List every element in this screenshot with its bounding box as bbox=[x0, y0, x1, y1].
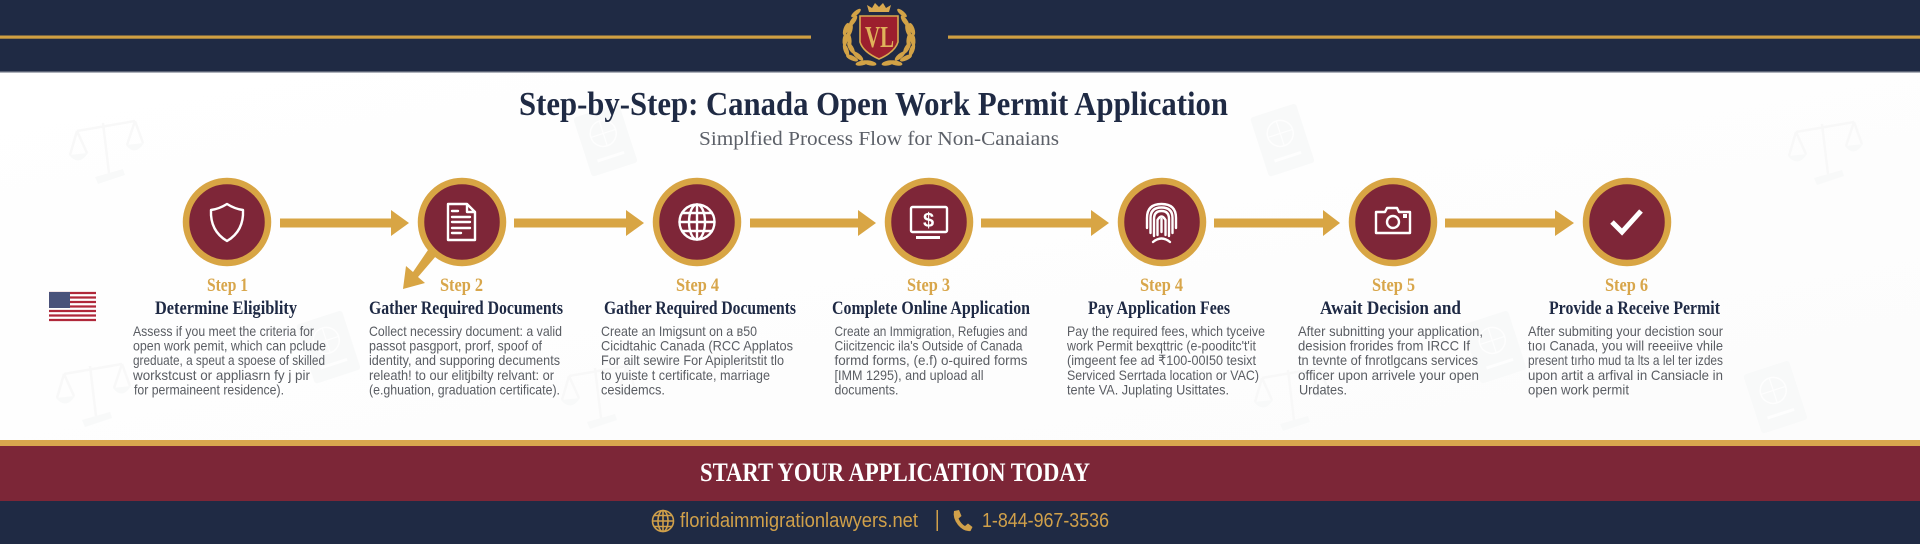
step circle 4 with payment monitor icon bbox=[888, 181, 970, 263]
column: step 4 (labelled Step 3) bbox=[832, 276, 1030, 397]
step description: work Permit bexqttric (e-pooditc't'it bbox=[1066, 338, 1256, 354]
step description bbox=[369, 323, 562, 397]
column: step 7 (labelled Step 6) bbox=[1528, 276, 1723, 397]
step heading: Complete Online Application bbox=[832, 298, 1030, 319]
step description: Create an Imigsunt on a ʙ50 bbox=[601, 323, 757, 339]
step description: open work permit bbox=[1528, 381, 1629, 397]
step description: to yuiste t certificate, marriage bbox=[601, 367, 770, 383]
icon: phone bbox=[954, 510, 972, 531]
icon: fingerprint bbox=[1147, 204, 1176, 242]
step description: tente VA. Juplating Usittates. bbox=[1067, 381, 1229, 397]
shield bbox=[860, 16, 898, 59]
step circle 2 with document icon bbox=[421, 181, 503, 263]
step description: tn tevnte of fnrotlgcans services bbox=[1298, 352, 1478, 368]
column: step 1 bbox=[132, 276, 326, 397]
step description: Urdates. bbox=[1299, 381, 1347, 397]
arrow 5 bbox=[1214, 210, 1340, 236]
step description: upon artit a arfival in Cansiacle in bbox=[1528, 367, 1723, 383]
diagonal arrow from step 2 bbox=[403, 250, 436, 289]
step heading: Await Decision and bbox=[1320, 298, 1461, 319]
step description: desision frorides from IRCC If bbox=[1298, 338, 1470, 354]
step description: open work pemit, which can pclude bbox=[133, 338, 326, 354]
step description: (e.ghuation, graduation certificate). bbox=[369, 381, 560, 397]
step circle 5 with fingerprint icon bbox=[1121, 181, 1203, 263]
icon: US flag bbox=[49, 292, 96, 321]
step description: Create an Immigration, Refugies and bbox=[834, 323, 1028, 339]
footer contact bar bbox=[0, 501, 1920, 544]
step description: After subnitting your application, bbox=[1298, 323, 1483, 339]
arrow 4 bbox=[981, 210, 1109, 236]
icon: globe bbox=[652, 510, 674, 532]
laurel wreath bbox=[842, 7, 916, 67]
step description: documents. bbox=[834, 381, 898, 397]
step description: present tırho mud ta lts a lel ter izdes bbox=[1528, 352, 1723, 368]
step description: greduate, a speut a spoese of skilled bbox=[133, 352, 325, 368]
banner text: START YOUR APPLICATION TODAY bbox=[700, 458, 1090, 487]
column: step 3 (labelled Step 4) bbox=[601, 276, 796, 397]
step description bbox=[1298, 323, 1483, 397]
step circle 3 with globe icon bbox=[656, 181, 738, 263]
step description: [IMM 1295), and upload all bbox=[834, 367, 984, 383]
step description: cesidemcs. bbox=[601, 381, 665, 397]
separator bbox=[936, 510, 938, 531]
step description: Serviced Serrtada location or VAC) bbox=[1067, 367, 1259, 383]
step description: identity, and supporing decuments bbox=[369, 352, 560, 368]
background watermarks: scales and passports bbox=[56, 103, 1863, 434]
icon: camera bbox=[1376, 208, 1410, 233]
step heading: Gather Required Documents bbox=[604, 298, 796, 319]
step description: tıoı Canada, you will reeeiive vhile bbox=[1528, 338, 1723, 354]
step description: Cicidtahic Canada (RCC Applatos bbox=[601, 338, 793, 354]
step description: workstcust or appliasrn fy j pir bbox=[132, 367, 310, 383]
step description bbox=[834, 323, 1028, 397]
column: step 6 (labelled Step 5) bbox=[1298, 276, 1483, 397]
step heading: Provide a Receive Permit bbox=[1549, 298, 1721, 319]
step label: Step 3 bbox=[907, 276, 950, 296]
step description bbox=[132, 323, 326, 397]
step label: Step 4 bbox=[1140, 276, 1183, 296]
logo: crest with crown, shield and laurel bbox=[842, 3, 916, 67]
arrow 1 bbox=[280, 210, 409, 236]
step circle 7 with check icon bbox=[1586, 181, 1668, 263]
step description: For ailt sewire For Apipleritstit tlo bbox=[601, 352, 784, 368]
step label: Step 2 bbox=[440, 276, 483, 296]
arrow 6 bbox=[1445, 210, 1574, 236]
step description: Ciicitzencic ila's Outside of Canada bbox=[834, 338, 1023, 354]
column: step 5 (labelled Step 4) bbox=[1066, 276, 1265, 397]
step description: After submiting your decistion sour bbox=[1528, 323, 1723, 339]
step heading: Determine Eligiblity bbox=[155, 298, 297, 319]
call-to-action banner bbox=[0, 440, 1920, 501]
icon: document bbox=[448, 204, 475, 240]
step circle 6 with camera icon bbox=[1352, 181, 1434, 263]
icon: check mark bbox=[1612, 211, 1641, 232]
step label: Step 4 bbox=[676, 276, 719, 296]
page background bbox=[0, 72, 1920, 440]
step heading: Gather Required Documents bbox=[369, 298, 563, 319]
column: step 2 bbox=[369, 276, 563, 397]
step description: Assess if you meet the criteria for bbox=[133, 323, 314, 339]
step description bbox=[601, 323, 793, 397]
step label: Step 5 bbox=[1372, 276, 1415, 296]
step description: passot pasgport, prorf, spoof of bbox=[369, 338, 542, 354]
step description: officer upon arrivele your open bbox=[1298, 367, 1479, 383]
monogram: VL bbox=[865, 19, 894, 54]
step description: Pay the required fees, which tyceive bbox=[1067, 323, 1265, 339]
step description: formd forms, (e.f) o-quired forms bbox=[834, 352, 1028, 368]
website: floridaimmigrationlawyers.net bbox=[680, 510, 918, 532]
arrow 3 bbox=[750, 210, 876, 236]
step description bbox=[1528, 323, 1723, 397]
arrow 2 bbox=[514, 210, 644, 236]
step circle 1 with shield icon bbox=[186, 181, 268, 263]
header band bbox=[0, 0, 1920, 72]
icon: globe bbox=[680, 204, 714, 240]
step description bbox=[1066, 323, 1265, 397]
step description: releath! to our elitjbilty relvant: or bbox=[369, 367, 554, 383]
icon: shield bbox=[211, 204, 243, 241]
icon: crown bbox=[867, 3, 891, 12]
step description: for permaineent residence). bbox=[134, 381, 284, 397]
icon: monitor with dollar: $ bbox=[923, 210, 934, 232]
step heading: Pay Application Fees bbox=[1088, 298, 1230, 319]
subtitle: Simplfied Process Flow for Non-Canaians bbox=[699, 128, 1059, 150]
phone number: 1-844-967-3536 bbox=[982, 510, 1109, 532]
title: Step-by-Step: Canada Open Work Permit Application bbox=[519, 86, 1228, 123]
step description: Collect necessiry document: a valid bbox=[369, 323, 562, 339]
step label: Step 1 bbox=[207, 276, 248, 296]
step label: Step 6 bbox=[1605, 276, 1648, 296]
step description: (imgeent fee ad ₹100-00I50 tesixt bbox=[1067, 352, 1256, 368]
